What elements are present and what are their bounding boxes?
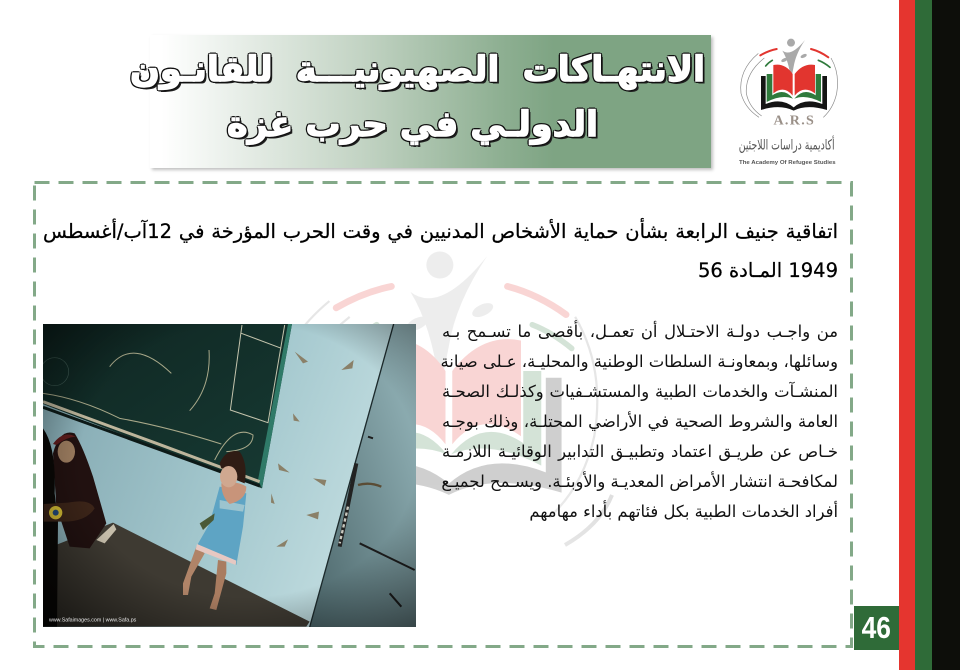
body line 1: من واجـب دولـة الاحتـلال أن تعمـل، بأقصى ما تسـمح بـه [442, 322, 838, 341]
side stripes [899, 0, 960, 670]
body paragraph [440, 320, 838, 521]
photo vignette [43, 324, 416, 627]
floor [43, 523, 310, 627]
title line 2: الدولـي في حرب غزة [227, 105, 598, 145]
photo credit: www.Safaimages.com | www.Safa.ps [49, 617, 137, 623]
body line 2: وسائلها، وبمعاونـة السلطات الوطنية والمحليـة، عـلى صيانة [440, 352, 838, 371]
content frame [33, 181, 853, 648]
door [310, 324, 416, 627]
foreground figure [43, 428, 95, 627]
photo: girl against classroom wall [43, 324, 416, 627]
logo [739, 38, 838, 166]
blackboard [41, 324, 292, 488]
green stripe [915, 0, 932, 670]
heading line 2: 1949 المـادة 56 [698, 259, 838, 282]
body line 5: خـاص عن طريـق اعتماد وتطبيـق التدابير الوقائيـة اللازمـة [442, 442, 838, 461]
watermark logo [304, 252, 614, 546]
logo english name: The Academy Of Refugee Studies [739, 160, 836, 166]
title text [130, 50, 705, 147]
title banner [150, 35, 711, 168]
body line 4: العامة والشروط الصحية في الأراضي المحتلـة، وذلك بوجـه [442, 412, 838, 431]
wall [43, 324, 416, 627]
body line 3: المنشـآت والخدمات الطبية والمستشـفيات وكذلـك الصحـة [442, 382, 838, 401]
body line 6: لمكافحـة انتشار الأمراض المعديـة والأوبئـة. ويسـمح لجميـع [441, 472, 838, 491]
logo initials: A.R.S [773, 114, 815, 129]
black stripe [932, 0, 960, 670]
girl [183, 451, 246, 610]
red stripe [899, 0, 915, 670]
page number [854, 606, 899, 650]
page number: 46 [862, 610, 891, 645]
logo calligraphy: أكاديمية دراسات اللاجئين [739, 135, 835, 154]
heading line 1: اتفاقية جنيف الرابعة بشأن حماية الأشخاص المدنيين في وقت الحرب المؤرخة في 12آب/أغسطس [43, 220, 838, 243]
seated woman [53, 432, 116, 548]
body line 7: أفراد الخدمات الطبية بكل فئاتهم بأداء مهامهم [529, 502, 838, 521]
wall scuffs [271, 352, 354, 547]
heading [43, 218, 838, 282]
title line 1: الانتهـاكات الصهيونيـــة للقانـون [130, 50, 705, 90]
